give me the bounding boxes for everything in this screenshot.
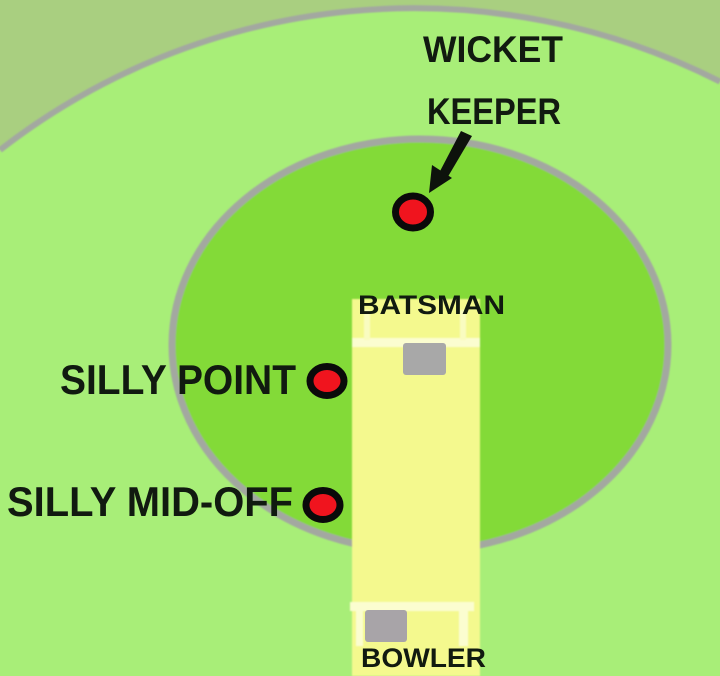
wicket keeper line two: KEEPER	[427, 91, 561, 132]
thirty-yard circle boundary	[0, 8, 720, 150]
label: silly point: SILLY POINT	[60, 356, 296, 403]
arrow to wicket keeper	[429, 131, 472, 193]
batsman crease returns	[364, 310, 466, 340]
pitch surface	[352, 299, 480, 676]
bowler crease returns	[356, 606, 468, 646]
silly mid-off fielder	[306, 490, 340, 520]
bowler crease	[350, 602, 474, 611]
outer field area	[0, 0, 720, 150]
batsman marker	[403, 343, 446, 375]
label: silly mid-off: SILLY MID-OFF	[7, 478, 293, 525]
label: wicket keeper	[423, 29, 563, 132]
bowler marker	[365, 610, 407, 642]
label: bowler: BOWLER	[361, 643, 486, 673]
wicket keeper line one: WICKET	[423, 29, 563, 70]
label: batsman: BATSMAN	[358, 290, 505, 320]
wicket keeper fielder	[396, 196, 430, 228]
pitch	[350, 299, 480, 676]
inner circle	[172, 139, 668, 551]
silly point fielder	[310, 366, 344, 396]
batsman crease	[352, 338, 480, 347]
